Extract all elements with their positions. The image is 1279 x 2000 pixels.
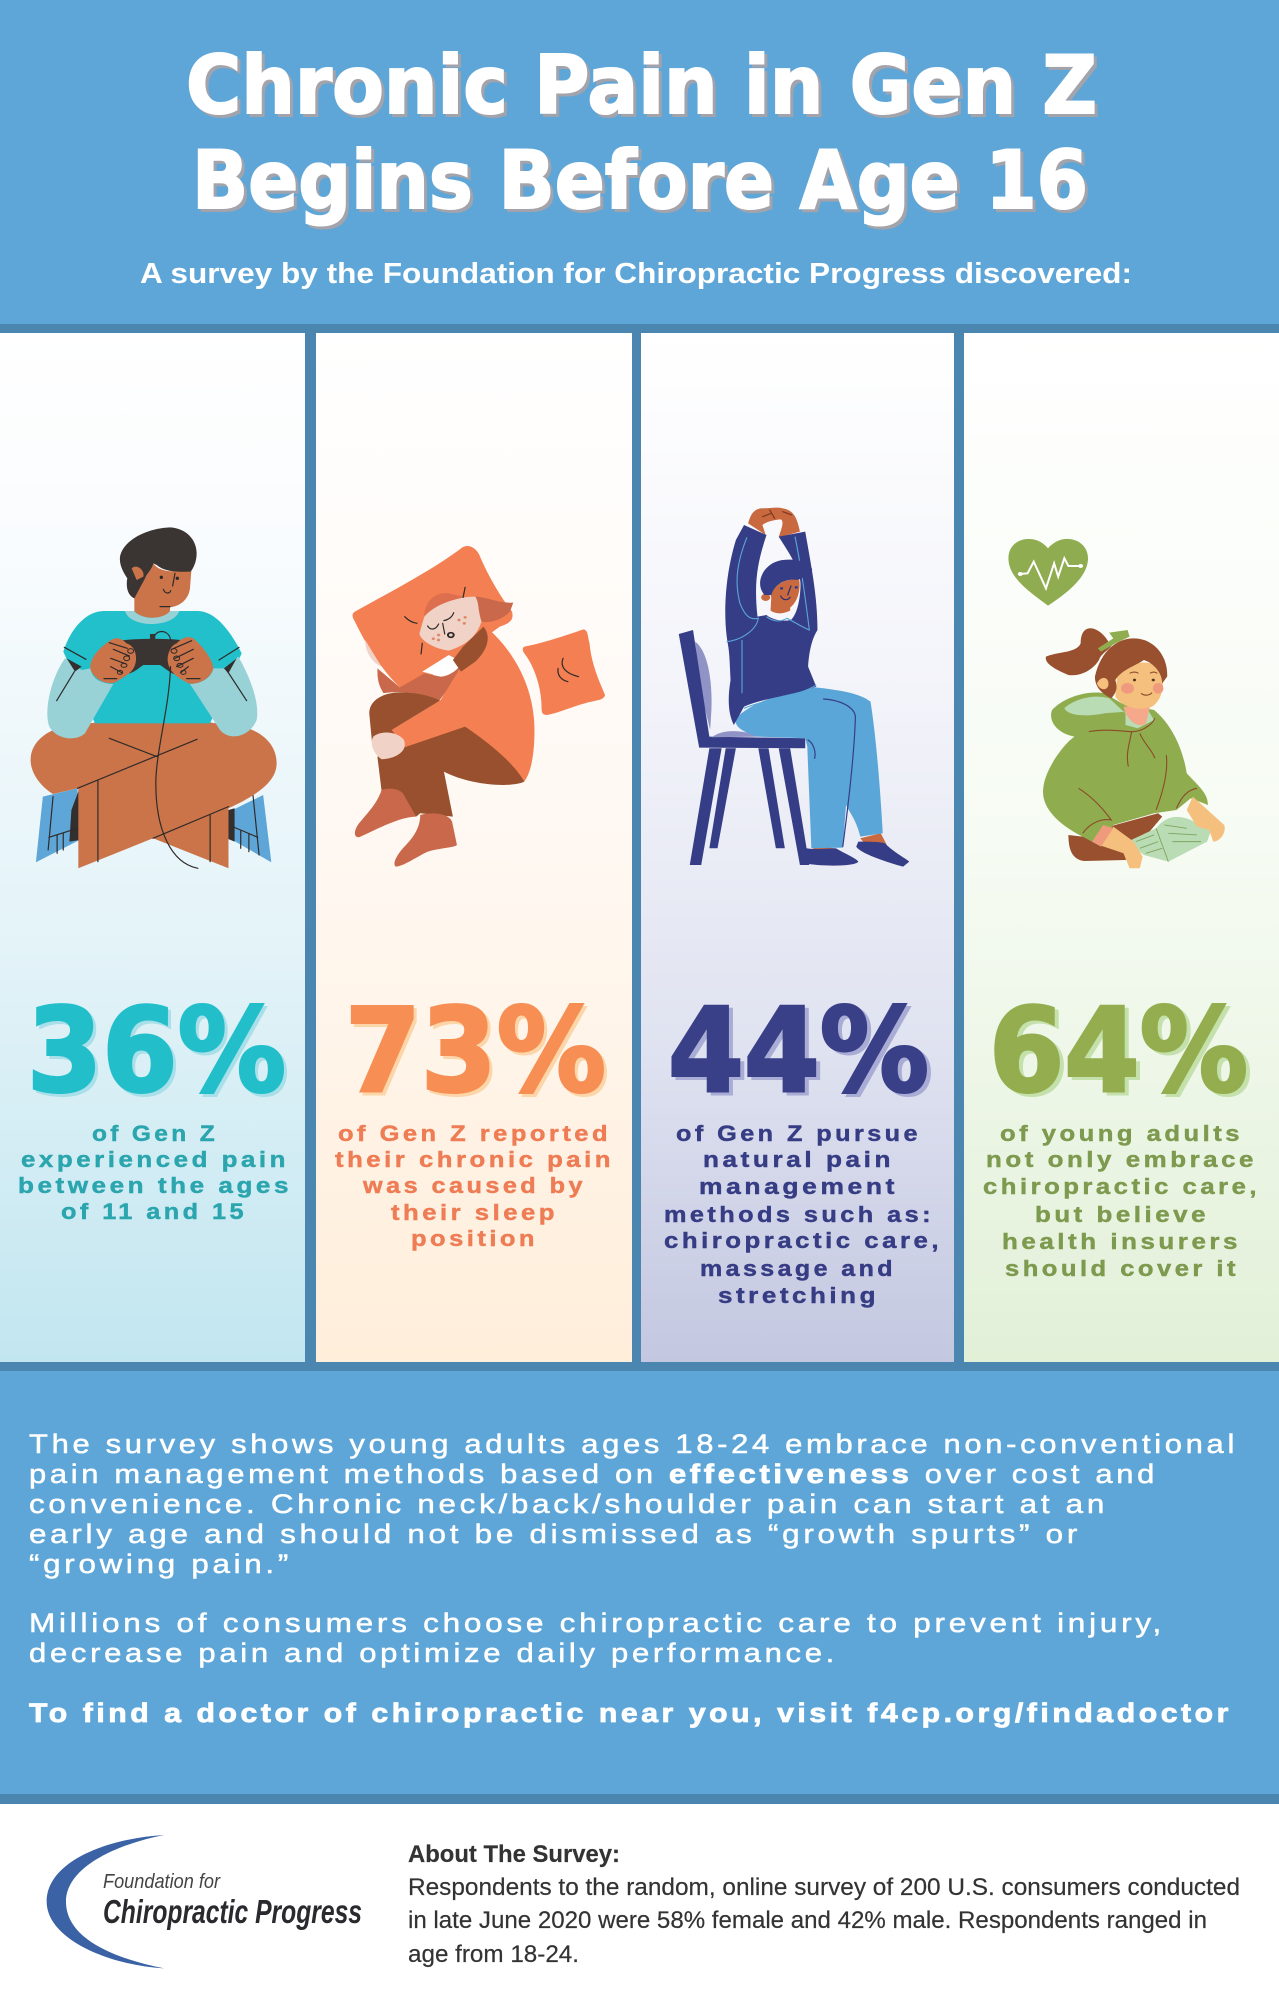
description: 36%: experienced pain [21, 1147, 289, 1172]
panel: 36 percent [0, 333, 305, 1362]
description: 73%: their sleep [391, 1200, 558, 1225]
about the survey [408, 1841, 1240, 1968]
title [186, 39, 1097, 227]
paragraph: survey findings: The survey shows young adults ages 18-24 embrace non-conventional [29, 1429, 1238, 1459]
description: 44%: methods such as: [664, 1202, 934, 1227]
description: 73%: of Gen Z reported [338, 1121, 611, 1146]
icon: person stretching on a chair [679, 508, 909, 867]
subtitle: A survey by the Foundation for Chiropractic Progress discovered: [140, 258, 1132, 290]
description: 64%: chiropractic care, [983, 1174, 1260, 1199]
paragraph: why consumers choose chiropractic: decrease pain and optimize daily performance. [29, 1638, 838, 1668]
panel: 44 percent [641, 333, 954, 1362]
panel: 64 percent [964, 333, 1279, 1362]
statistic: 36%: 36% [27, 984, 286, 1119]
description: 64%: should cover it [1005, 1256, 1239, 1281]
header panel [0, 0, 1279, 324]
paragraph: why consumers choose chiropractic [29, 1608, 1165, 1668]
paragraph: survey findings: convenience. Chronic neck/back/shoulder pain can start at an [29, 1489, 1108, 1519]
icon: heart with pulse line [1008, 539, 1088, 606]
description: 44%: of Gen Z pursue [676, 1121, 921, 1146]
paragraph: survey findings: pain management methods based on effectiveness over cost and [29, 1459, 1158, 1489]
about the survey: age from 18-24. [408, 1941, 579, 1968]
title: Begins Before Age 16 [192, 134, 1088, 227]
about the survey: About The Survey: [408, 1841, 620, 1868]
description: 73%: their chronic pain [335, 1147, 614, 1172]
call to action: To find a doctor of chiropractic near you, visit f4cp.org/findadoctor [29, 1698, 1232, 1728]
paragraph: survey findings: early age and should not be dismissed as “growth spurts” or [29, 1519, 1081, 1549]
description: 64% [983, 1121, 1260, 1281]
footer band [0, 1804, 1279, 2000]
icon: boy with game controller [31, 527, 277, 868]
panel: survey summary [0, 1371, 1279, 1794]
description: 44%: massage and [700, 1256, 896, 1281]
paragraph: survey findings [29, 1429, 1238, 1579]
description: 36%: of Gen Z [92, 1121, 218, 1146]
statistic: 73%: 73% [345, 984, 606, 1119]
page background bands [0, 324, 1279, 1804]
description: 44%: management [699, 1174, 898, 1199]
panel: 73 percent [316, 333, 632, 1362]
about the survey: Respondents to the random, online survey of 200 U.S. consumers conducted [408, 1874, 1240, 1901]
description: 36%: between the ages [18, 1173, 292, 1198]
description: 73% [335, 1121, 614, 1251]
logo: Foundation for Chiropractic Progress: Foundation for [103, 1871, 221, 1893]
logo: Foundation for Chiropractic Progress [47, 1835, 362, 1968]
description: 44%: chiropractic care, [664, 1228, 942, 1253]
paragraph: why consumers choose chiropractic: Millions of consumers choose chiropractic care to prevent injury, [29, 1608, 1165, 1638]
description: 44% [664, 1121, 942, 1308]
description: 64%: not only embrace [986, 1147, 1257, 1172]
about the survey: in late June 2020 were 58% female and 42% male. Respondents ranged in [408, 1907, 1207, 1934]
logo: Foundation for Chiropractic Progress: Chiropractic Progress [103, 1893, 362, 1930]
description: 73%: position [411, 1226, 538, 1251]
statistic: 44%: 44% [668, 984, 929, 1119]
description: 44%: natural pain [703, 1147, 894, 1172]
description: 64%: but believe [1035, 1202, 1209, 1227]
description: 36%: of 11 and 15 [61, 1199, 247, 1224]
description: 64%: of young adults [1000, 1121, 1243, 1146]
description: 44%: stretching [718, 1283, 879, 1308]
description: 73%: was caused by [362, 1173, 586, 1198]
icon: girl in green hoodie reading a book [1043, 628, 1225, 868]
paragraph: survey findings: “growing pain.” [29, 1549, 292, 1579]
statistic: 64%: 64% [989, 984, 1248, 1119]
title: Chronic Pain in Gen Z [186, 39, 1097, 132]
description: 36% [18, 1121, 292, 1224]
description: 64%: health insurers [1002, 1229, 1241, 1254]
icon: girl sleeping curled with pillows [353, 546, 605, 867]
